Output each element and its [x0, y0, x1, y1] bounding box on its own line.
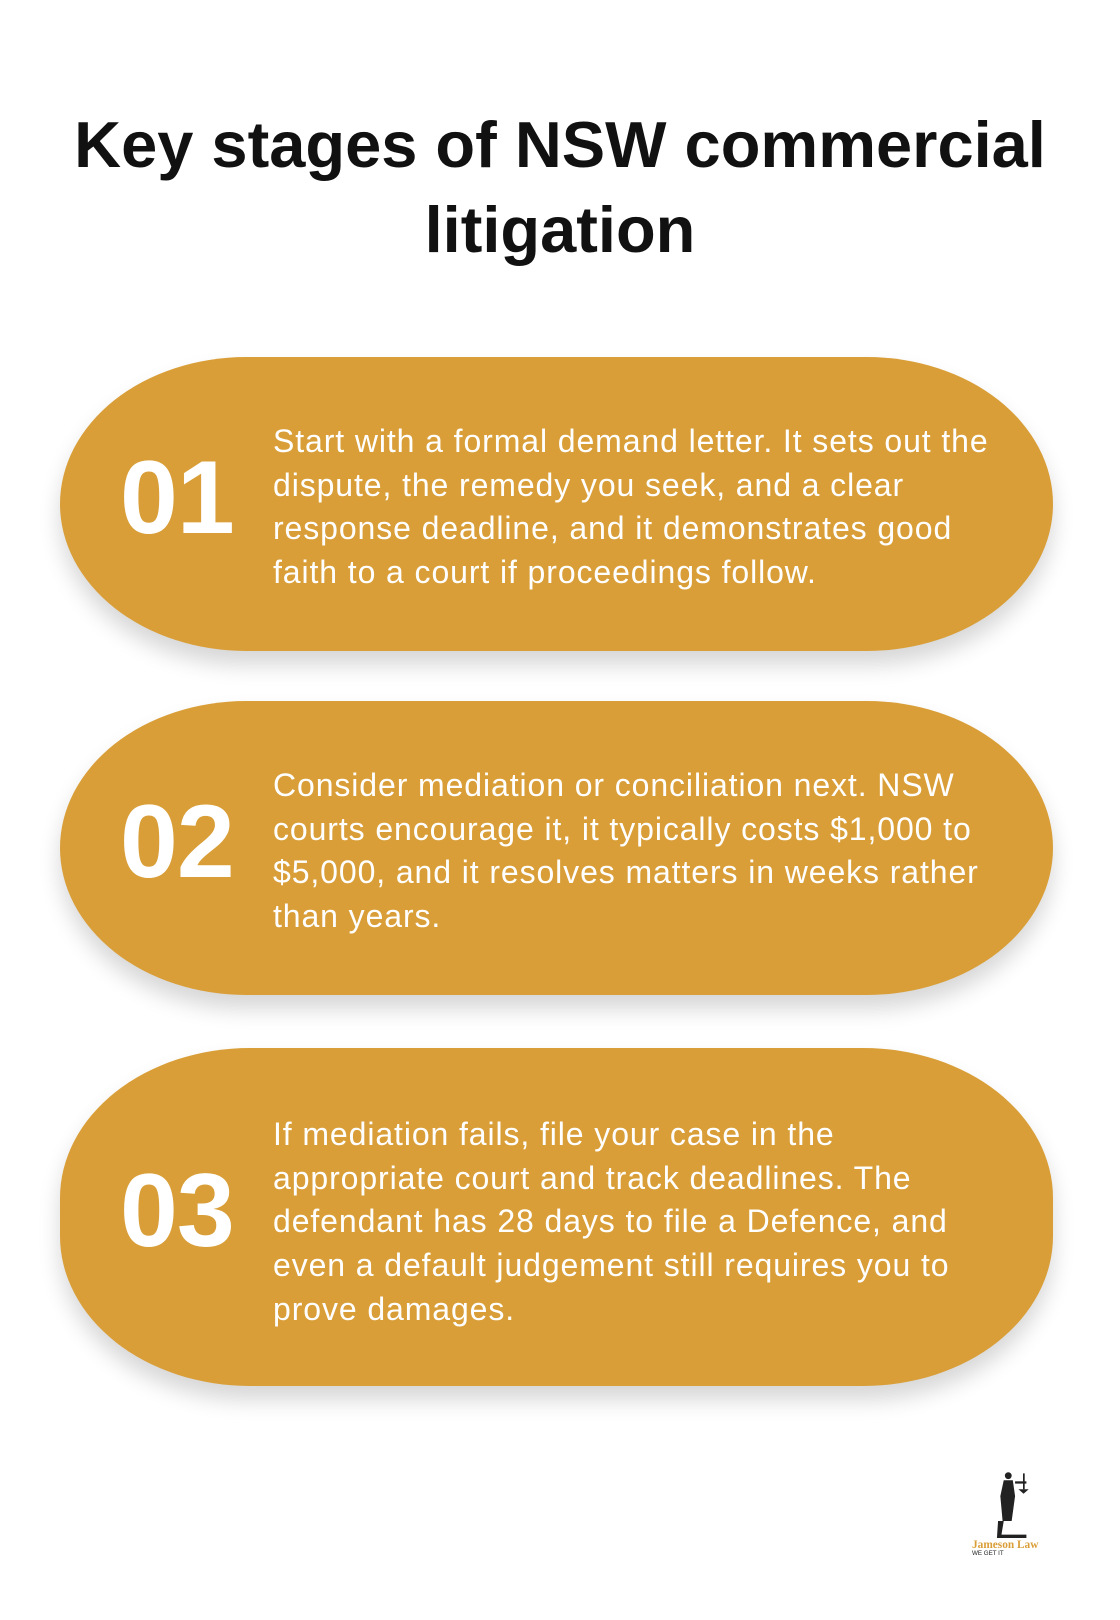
title [74, 108, 1046, 266]
text: stage 03: If mediation fails, file your case in the [273, 1116, 835, 1152]
text: stage 02: courts encourage it, it typically costs $1,000 to [273, 811, 972, 847]
text: stage 02 [273, 767, 979, 934]
text: stage 03 [273, 1116, 949, 1327]
logo: Jameson Law [972, 1472, 1039, 1555]
text: stage 03: prove damages. [273, 1291, 515, 1327]
text: stage 03: defendant has 28 days to file a Defence, and [273, 1203, 948, 1239]
text: stage 03: appropriate court and track deadlines. The [273, 1160, 911, 1196]
logo text: Jameson Law [972, 1539, 1039, 1551]
text: stage 02: $5,000, and it resolves matters in weeks rather [273, 854, 979, 890]
number 01: 01 [120, 440, 234, 556]
text: stage 02: Consider mediation or conciliation next. NSW [273, 767, 955, 803]
text: stage 01: dispute, the remedy you seek, and a clear [273, 467, 904, 503]
number 02: 02 [120, 784, 234, 900]
number 03: 03 [120, 1153, 234, 1269]
text: stage 03: even a default judgement still requires you to [273, 1247, 949, 1283]
text: stage 01: faith to a court if proceedings follow. [273, 554, 817, 590]
text: stage 01: Start with a formal demand letter. It sets out the [273, 423, 989, 459]
title: Key stages of NSW commercial [74, 108, 1046, 181]
panel: stage 03 [60, 1048, 1053, 1386]
icon: lady justice [997, 1472, 1029, 1538]
text: stage 02: than years. [273, 898, 441, 934]
title: litigation [425, 193, 695, 266]
text: stage 01: response deadline, and it demonstrates good [273, 510, 952, 546]
text: stage 01 [273, 423, 989, 590]
panel: stage 01 [60, 357, 1053, 651]
panel: stage 02 [60, 701, 1053, 995]
